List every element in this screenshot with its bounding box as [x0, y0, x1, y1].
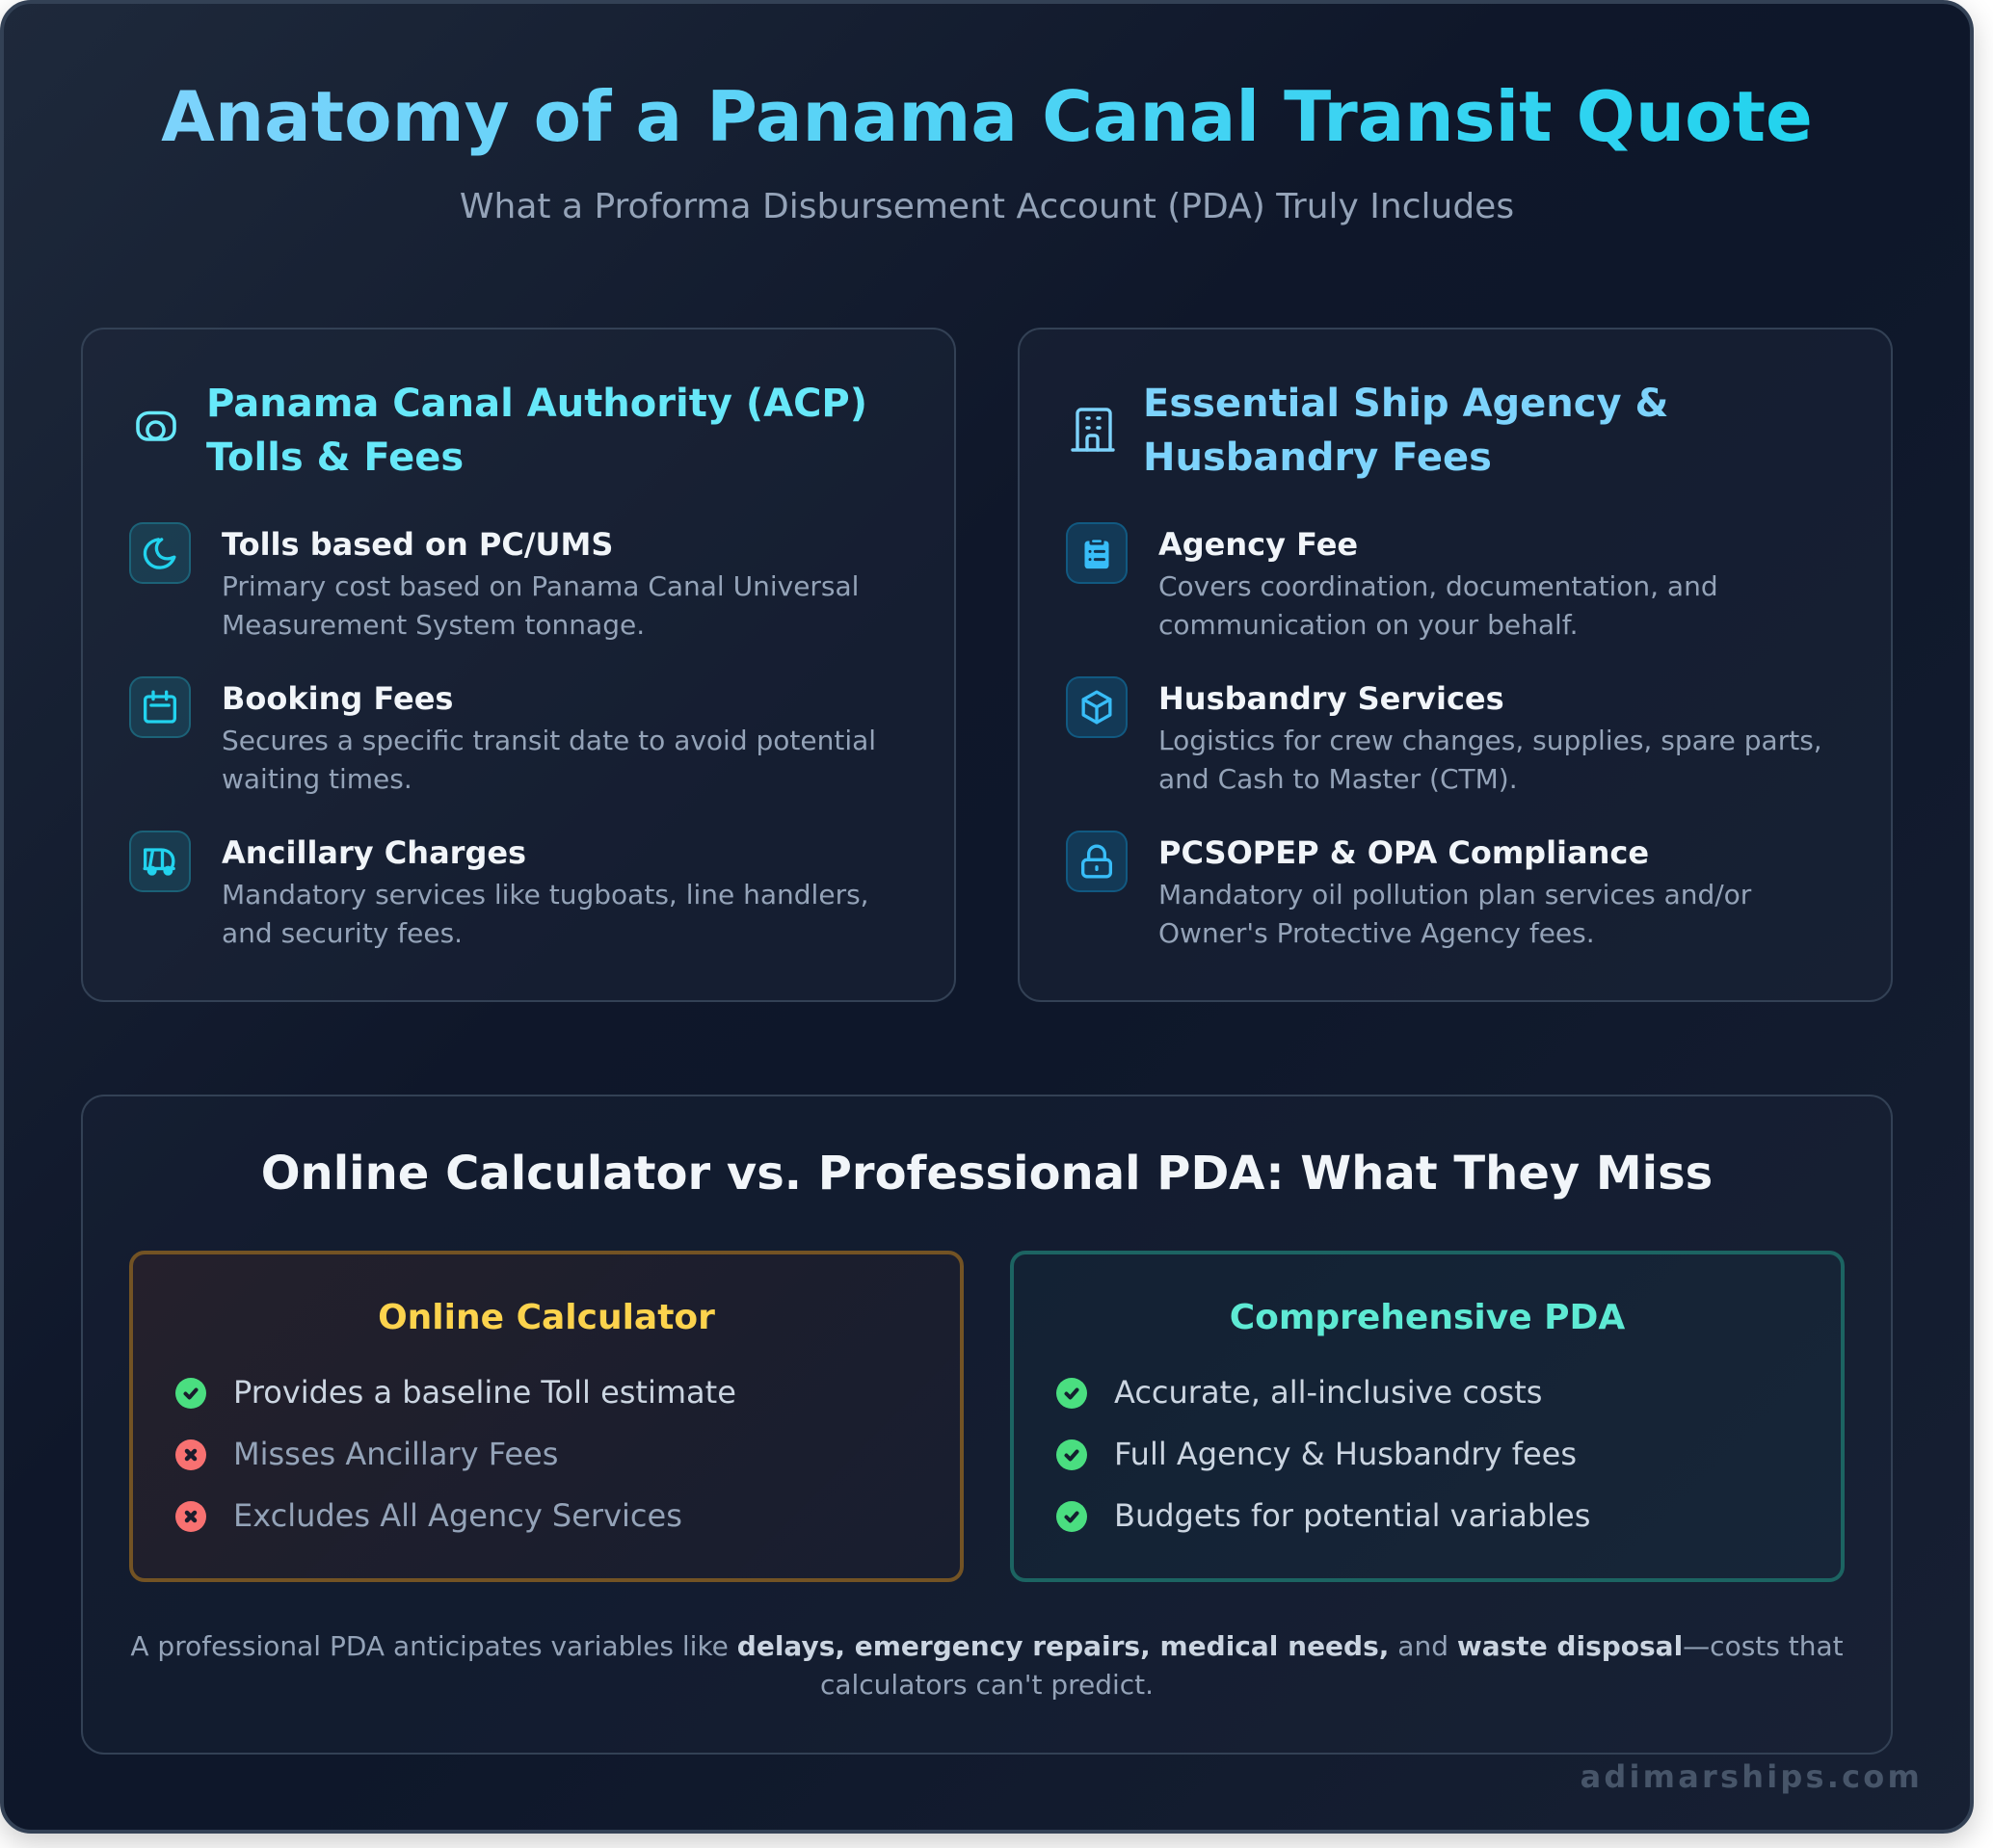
- list item: Provides a baseline Toll estimate: [233, 1374, 736, 1411]
- icon: ship: [136, 410, 176, 441]
- icon: lock: [1066, 831, 1128, 892]
- footnote: calculators can't predict.: [820, 1669, 1154, 1701]
- item: ancillary charges: [222, 834, 869, 949]
- panel: agency and husbandry fees: [1018, 328, 1893, 1002]
- item: booking fees: waiting times.: [222, 763, 412, 795]
- icon: check: [1056, 1501, 1087, 1532]
- icon: cube: [1066, 676, 1128, 738]
- heading: agency fees: [1143, 382, 1668, 480]
- card heading: comprehensive PDA: Comprehensive PDA: [1230, 1298, 1625, 1337]
- item: agency fee: communication on your behalf.: [1158, 609, 1578, 641]
- subtitle: What a Proforma Disbursement Account (PDA) Truly Includes: [460, 187, 1514, 226]
- list item: Misses Ancillary Fees: [233, 1436, 558, 1472]
- list item: Accurate, all-inclusive costs: [1114, 1374, 1542, 1411]
- title: Anatomy of a Panama Canal Transit Quote: [161, 76, 1813, 157]
- icon: truck: [129, 831, 191, 892]
- item: tolls: Measurement System tonnage.: [222, 609, 645, 641]
- item: compliance: [1158, 834, 1752, 949]
- item: compliance: Mandatory oil pollution plan services and/or: [1158, 879, 1751, 911]
- footnote: A professional PDA anticipates variables like delays, emergency repairs, medical needs, and waste disposal—costs that: [130, 1630, 1844, 1662]
- item: tolls: [222, 526, 859, 641]
- heading: agency fees: Essential Ship Agency &: [1143, 382, 1668, 426]
- item: husbandry services: Logistics for crew changes, supplies, spare parts,: [1158, 725, 1822, 756]
- card: online calculator: [129, 1251, 964, 1582]
- list item: Budgets for potential variables: [1114, 1497, 1590, 1534]
- list item: Excludes All Agency Services: [233, 1497, 682, 1534]
- item: booking fees: Booking Fees: [222, 680, 453, 717]
- icon: building: [1071, 408, 1115, 452]
- icon: clipboard: [1066, 522, 1128, 584]
- item: ancillary charges: Ancillary Charges: [222, 834, 526, 871]
- item: booking fees: [222, 680, 876, 795]
- item: booking fees: Secures a specific transit date to avoid potential: [222, 725, 876, 756]
- item: compliance: Owner's Protective Agency fees.: [1158, 917, 1595, 949]
- item: husbandry services: Husbandry Services: [1158, 680, 1504, 717]
- item: compliance: PCSOPEP & OPA Compliance: [1158, 834, 1649, 871]
- comparison heading: Online Calculator vs. Professional PDA: What They Miss: [261, 1147, 1713, 1201]
- card: comprehensive PDA: [1010, 1251, 1845, 1582]
- item: husbandry services: and Cash to Master (CTM).: [1158, 763, 1518, 795]
- panel: comparison: [81, 1095, 1893, 1755]
- icon: check: [1056, 1378, 1087, 1409]
- heading: ACP tolls: Tolls & Fees: [206, 436, 464, 480]
- item: agency fee: Covers coordination, documentation, and: [1158, 570, 1718, 602]
- panel: ACP tolls and fees: [81, 328, 956, 1002]
- icon: moon: [129, 522, 191, 584]
- heading: ACP tolls: Panama Canal Authority (ACP): [206, 382, 867, 426]
- item: husbandry services: [1158, 680, 1822, 795]
- item: ancillary charges: and security fees.: [222, 917, 463, 949]
- item: tolls: Tolls based on PC/UMS: [222, 526, 613, 563]
- heading: agency fees: Husbandry Fees: [1143, 436, 1492, 480]
- list item: Full Agency & Husbandry fees: [1114, 1436, 1577, 1472]
- icon: cross: [175, 1439, 206, 1470]
- item: agency fee: Agency Fee: [1158, 526, 1358, 563]
- icon: calendar: [129, 676, 191, 738]
- item: ancillary charges: Mandatory services like tugboats, line handlers,: [222, 879, 869, 911]
- card heading: online calculator: Online Calculator: [378, 1298, 715, 1337]
- icon: check: [175, 1378, 206, 1409]
- item: tolls: Primary cost based on Panama Canal Universal: [222, 570, 859, 602]
- item: agency fee: [1158, 526, 1718, 641]
- watermark: adimarships.com: [1581, 1758, 1923, 1795]
- icon: check: [1056, 1439, 1087, 1470]
- icon: cross: [175, 1501, 206, 1532]
- heading: ACP tolls: [206, 382, 867, 480]
- footnote: [130, 1630, 1844, 1701]
